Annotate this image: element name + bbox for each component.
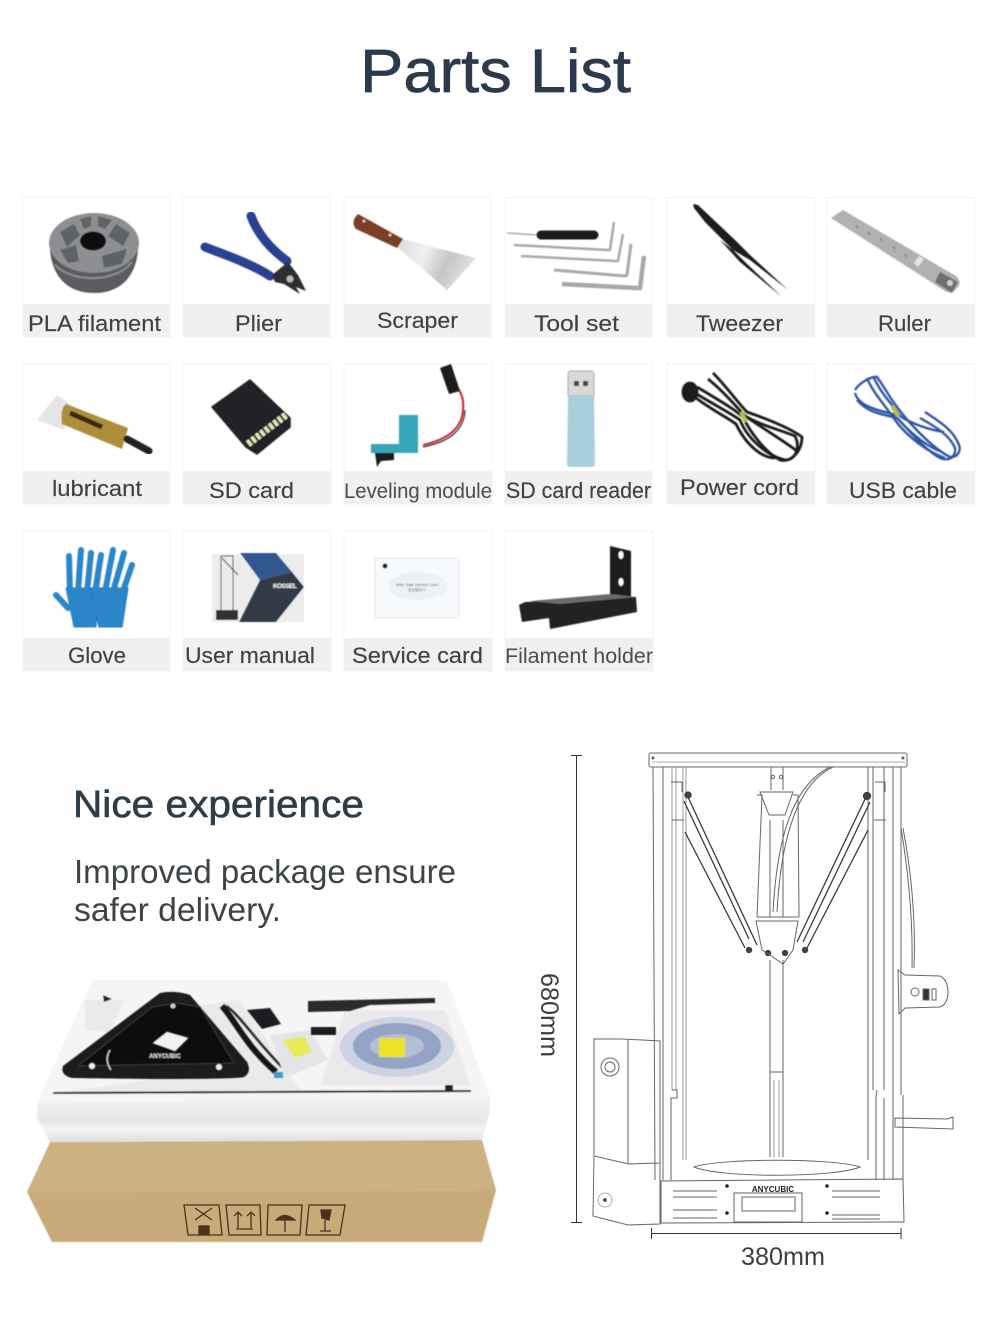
icon: lubricant tube	[37, 395, 149, 451]
icon: filament spool	[49, 213, 139, 293]
label: Scraper	[377, 308, 459, 333]
icon: power cord	[683, 373, 802, 460]
icon: ruler	[831, 210, 960, 293]
panel: Filament holder	[505, 531, 653, 671]
label: Tool set	[534, 311, 620, 336]
icon: USB cable	[855, 377, 960, 459]
label: Filament holder	[505, 644, 653, 668]
text block: package note: safer delivery.	[74, 891, 281, 928]
rods	[308, 998, 435, 1012]
chart: printer line drawing	[593, 753, 953, 1225]
icon: SD card reader	[567, 371, 595, 467]
icon: service card: 售后服务卡	[408, 587, 426, 592]
filament roll	[340, 1017, 454, 1077]
label: Plier	[235, 311, 283, 336]
small black part	[311, 1027, 336, 1035]
black triangular base: ANYCUBIC	[149, 1054, 181, 1060]
filament holder arm	[895, 1117, 953, 1129]
icon: plier	[205, 216, 306, 294]
icon: service card: After Sale Service Card	[396, 582, 438, 587]
label: USB cable	[849, 478, 957, 503]
panel: Glove	[23, 531, 170, 671]
panel: SD card	[183, 364, 331, 504]
power supply box	[593, 1039, 660, 1225]
label: Service card	[352, 643, 483, 668]
center column	[770, 960, 783, 1157]
label: SD card	[209, 478, 294, 503]
top frame	[649, 753, 907, 767]
panel: SD card reader	[505, 364, 652, 504]
panel: USB cable	[827, 364, 975, 504]
label: Ruler	[878, 311, 931, 336]
text block: package note: Improved package ensure	[74, 853, 456, 890]
label: SD card reader	[506, 478, 651, 503]
panel: Tweezer	[667, 197, 815, 337]
center carriage and rods	[756, 767, 799, 964]
power cable and brick	[222, 1006, 328, 1078]
panel: Service card	[344, 531, 492, 671]
cardboard box	[27, 1140, 496, 1242]
label: Leveling module	[344, 480, 492, 503]
label: PLA filament	[28, 311, 162, 336]
dimension: width arrow line	[652, 1228, 901, 1239]
label: Glove	[68, 643, 126, 668]
left pillar	[653, 767, 686, 1180]
panel: Leveling module	[344, 364, 492, 504]
icon: gloves	[56, 550, 132, 627]
panel: PLA filament	[23, 197, 170, 337]
panel: lubricant	[23, 364, 170, 504]
handling symbols	[184, 1205, 345, 1235]
right pillar	[868, 767, 903, 1180]
icon: tool set	[507, 222, 644, 288]
brand text: ANYCUBIC	[752, 1185, 794, 1194]
label: Tweezer	[696, 311, 784, 336]
bowden tube	[773, 767, 833, 912]
dimension: height arrow line	[571, 755, 582, 1222]
label: lubricant	[52, 476, 143, 501]
panel: Ruler	[827, 197, 975, 337]
icon: filament holder	[519, 546, 637, 629]
black triangular base	[62, 992, 249, 1079]
heading: nice experience: Nice experience	[73, 784, 364, 826]
print bed	[694, 1160, 860, 1175]
right side tube and extruder	[898, 828, 948, 1014]
label: User manual	[185, 643, 315, 668]
icon: scraper	[353, 214, 476, 290]
panel: Plier	[183, 197, 330, 337]
panel: packaged printer photo	[27, 980, 496, 1242]
icon: leveling module	[371, 364, 465, 467]
panel: User manual	[183, 531, 331, 671]
icon: tweezer	[693, 204, 788, 297]
delta arms	[684, 792, 870, 956]
title: Parts List	[360, 37, 631, 105]
icon: service card	[375, 558, 459, 618]
panel: Scraper	[344, 197, 491, 337]
foam block	[37, 980, 490, 1142]
panel: Power cord	[667, 364, 815, 504]
base panel	[661, 1179, 904, 1223]
icon: SD card	[212, 380, 290, 454]
dimension label: 680mm: 680mm	[535, 973, 563, 1057]
dimension label: 380mm: 380mm	[741, 1243, 825, 1271]
label: Power cord	[680, 475, 799, 500]
text block: package note	[74, 853, 456, 928]
icon: user manual	[212, 553, 304, 622]
icon: user manual: KOSSEL	[273, 583, 297, 590]
panel: Tool set	[505, 197, 652, 337]
